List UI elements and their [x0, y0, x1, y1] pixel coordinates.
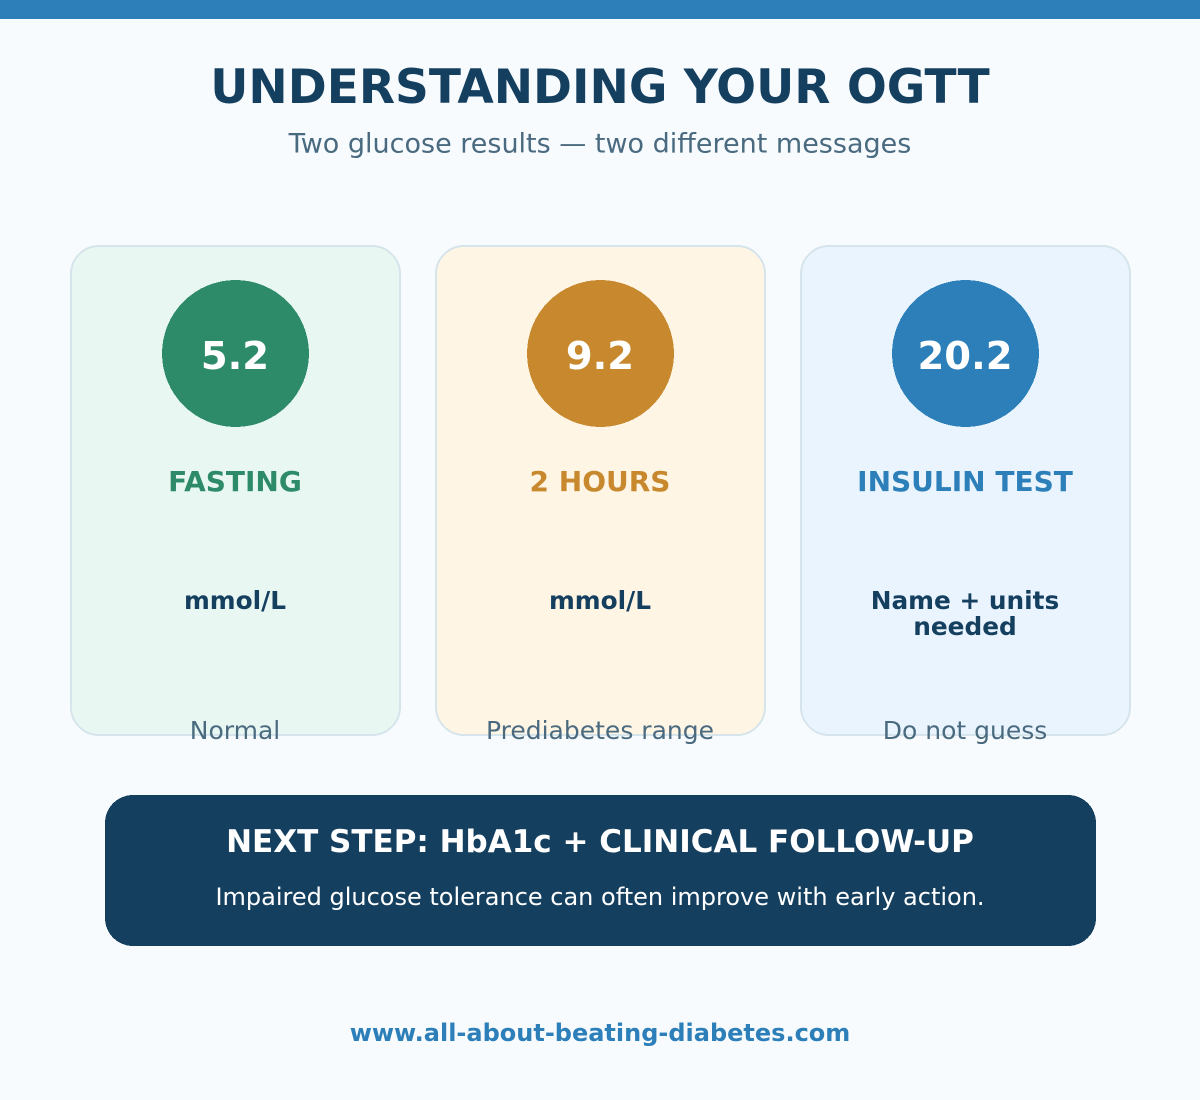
card background: insulin test: [801, 246, 1130, 735]
value circle: 5.2: 5.2: [201, 334, 269, 379]
unit: name and units needed: needed: [913, 612, 1017, 641]
status: prediabetes range: Prediabetes range: [486, 716, 714, 745]
value circle: 5.2: [162, 280, 309, 427]
value circle: 9.2: [527, 280, 674, 427]
title: UNDERSTANDING YOUR OGTT: [210, 60, 990, 115]
heading: 2 hours: 2 HOURS: [530, 465, 670, 498]
callout text: Impaired glucose tolerance can often improve with early action.: [215, 883, 985, 911]
value circle: 9.2: 9.2: [566, 334, 634, 379]
heading: insulin test: INSULIN TEST: [857, 465, 1073, 498]
unit: name and units needed: Name + units: [871, 586, 1059, 615]
status: normal: Normal: [190, 716, 280, 745]
panel: insulin test: [801, 246, 1130, 745]
callout heading: NEXT STEP: HbA1c + CLINICAL FOLLOW-UP: [226, 824, 974, 860]
heading: fasting: FASTING: [168, 465, 302, 498]
unit: mmol/L: mmol/L: [184, 586, 286, 615]
card background: fasting: [71, 246, 400, 735]
value circle: 20.2: [892, 280, 1039, 427]
value circle: 20.2: 20.2: [918, 334, 1012, 379]
callout: next step: [105, 795, 1096, 946]
subtitle: Two glucose results — two different messages: [288, 128, 911, 160]
panel: fasting: [71, 246, 400, 745]
unit: mmol/L: mmol/L: [549, 586, 651, 615]
panel: 2 hours: [436, 246, 765, 745]
footer url: www.all-about-beating-diabetes.com: [350, 1019, 850, 1047]
status: do not guess: Do not guess: [883, 716, 1047, 745]
card background: 2 hours: [436, 246, 765, 735]
callout background: [105, 795, 1096, 946]
top accent bar: [0, 0, 1200, 19]
